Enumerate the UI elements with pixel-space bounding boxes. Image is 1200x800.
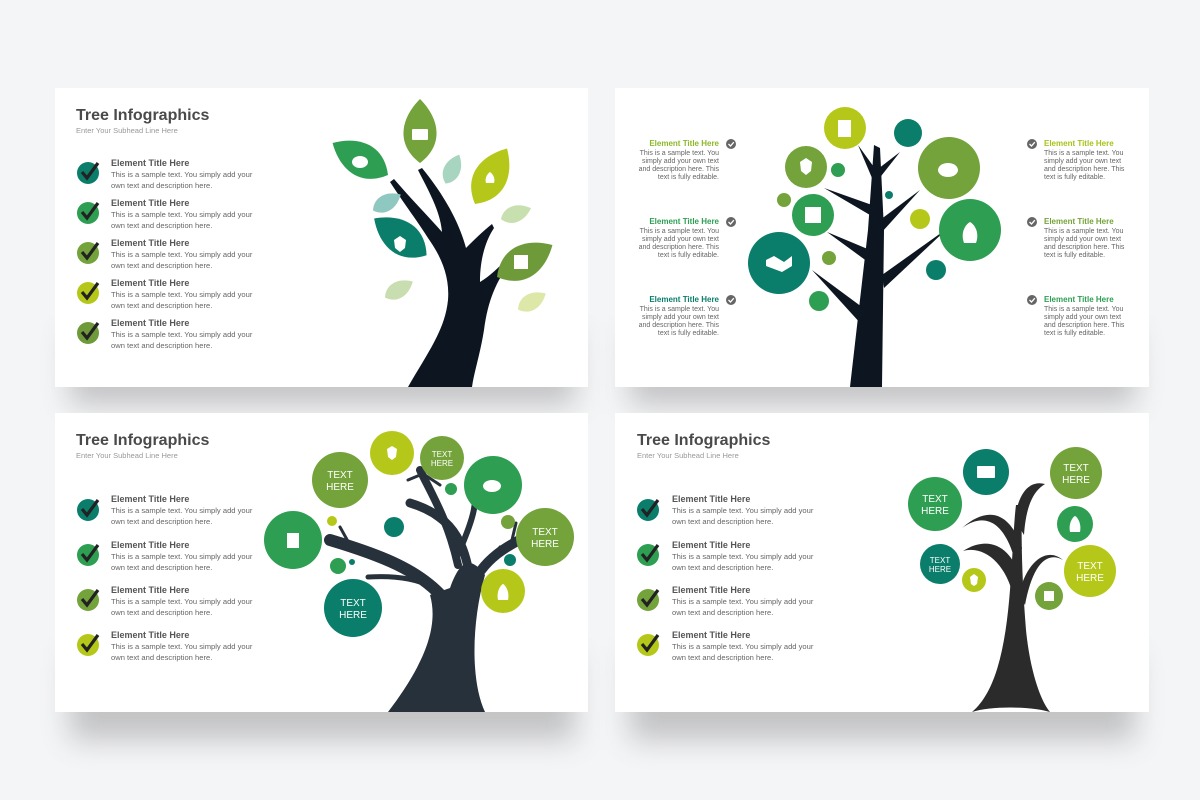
right text blocks: and description here. This xyxy=(1044,322,1125,329)
subhead: Enter Your Subhead Line Here xyxy=(76,451,178,460)
checklist: own text and description here. xyxy=(111,181,212,190)
circles: HERE xyxy=(921,506,949,517)
circles xyxy=(264,431,574,637)
left text blocks: text is fully editable. xyxy=(658,252,719,259)
checklist: This is a sample text. You simply add your xyxy=(111,597,253,606)
tree: straight trunk with branches xyxy=(812,145,948,387)
checklist: Element Title Here xyxy=(111,278,189,288)
left text blocks: Element Title Here xyxy=(649,139,720,148)
title: Tree Infographics xyxy=(76,432,209,449)
left text blocks: text is fully editable. xyxy=(658,174,719,181)
checklist: This is a sample text. You simply add your xyxy=(111,210,253,219)
shadows xyxy=(70,330,1135,740)
title: Tree Infographics xyxy=(76,107,209,124)
left text blocks: This is a sample text. You xyxy=(640,150,719,157)
checklist: Element Title Here xyxy=(672,540,750,550)
checklist xyxy=(77,494,253,662)
circles: TEXT xyxy=(340,598,366,609)
checklist: Element Title Here xyxy=(111,238,189,248)
tree xyxy=(962,483,1063,712)
check icons xyxy=(726,139,1037,305)
panel: top-right slide xyxy=(615,88,1149,387)
right text blocks: text is fully editable. xyxy=(1044,252,1105,259)
circles xyxy=(908,447,1116,610)
checklist: own text and description here. xyxy=(672,608,773,617)
right text blocks: and description here. This xyxy=(1044,244,1125,251)
circles with icons xyxy=(748,107,1001,311)
tree: curved trunk xyxy=(390,168,511,387)
circles: HERE xyxy=(929,565,951,574)
left text blocks: Element Title Here xyxy=(649,295,720,304)
subhead: Enter Your Subhead Line Here xyxy=(637,451,739,460)
checklist: Element Title Here xyxy=(111,540,189,550)
left text blocks: simply add your own text xyxy=(642,158,719,165)
circles: HERE xyxy=(1062,475,1090,486)
checklist: This is a sample text. You simply add your xyxy=(111,170,253,179)
circles: HERE xyxy=(326,482,354,493)
checklist: own text and description here. xyxy=(111,261,212,270)
right text blocks: simply add your own text xyxy=(1044,314,1121,321)
checklist: Element Title Here xyxy=(111,158,189,168)
checklist: This is a sample text. You simply add your xyxy=(111,290,253,299)
left text blocks: and description here. This xyxy=(639,322,719,329)
checklist: This is a sample text. You simply add your xyxy=(672,642,814,651)
checklist: Element Title Here xyxy=(672,630,750,640)
circles: TEXT xyxy=(930,556,950,565)
checklist xyxy=(77,158,253,350)
title: Tree Infographics xyxy=(637,432,770,449)
circles: HERE xyxy=(431,459,453,468)
circles: TEXT xyxy=(1077,561,1103,572)
circles: TEXT xyxy=(432,450,452,459)
checklist: This is a sample text. You simply add your xyxy=(672,506,814,515)
right text blocks: simply add your own text xyxy=(1044,158,1121,165)
checklist: own text and description here. xyxy=(111,301,212,310)
checklist: own text and description here. xyxy=(111,608,212,617)
left text blocks: and description here. This xyxy=(639,244,719,251)
circles: HERE xyxy=(1076,573,1104,584)
right text blocks: This is a sample text. You xyxy=(1044,228,1123,235)
leaves with icons xyxy=(324,99,561,317)
checklist: This is a sample text. You simply add your xyxy=(111,330,253,339)
right text blocks: Element Title Here xyxy=(1044,139,1114,148)
subhead: Enter Your Subhead Line Here xyxy=(76,126,178,135)
checklist: This is a sample text. You simply add your xyxy=(111,552,253,561)
checklist: own text and description here. xyxy=(111,517,212,526)
checklist: This is a sample text. You simply add your xyxy=(111,250,253,259)
left text blocks: text is fully editable. xyxy=(658,330,719,337)
checklist: own text and description here. xyxy=(111,653,212,662)
checklist: own text and description here. xyxy=(111,341,212,350)
right text blocks: and description here. This xyxy=(1044,166,1125,173)
panel: top-left slide xyxy=(55,88,588,387)
checklist: Element Title Here xyxy=(111,198,189,208)
left text blocks: and description here. This xyxy=(639,166,719,173)
panel: bottom-right slide xyxy=(615,413,1149,712)
left text blocks: simply add your own text xyxy=(642,314,719,321)
checklist: This is a sample text. You simply add your xyxy=(111,642,253,651)
checklist: own text and description here. xyxy=(672,563,773,572)
left text blocks: Element Title Here xyxy=(649,217,720,226)
left text blocks: This is a sample text. You xyxy=(640,228,719,235)
circles: HERE xyxy=(339,610,367,621)
checklist: This is a sample text. You simply add your xyxy=(672,552,814,561)
right text blocks: Element Title Here xyxy=(1044,217,1114,226)
tree xyxy=(330,470,545,712)
checklist: Element Title Here xyxy=(111,318,189,328)
checklist: This is a sample text. You simply add your xyxy=(672,597,814,606)
checklist: own text and description here. xyxy=(111,221,212,230)
left text blocks: simply add your own text xyxy=(642,236,719,243)
right text blocks: text is fully editable. xyxy=(1044,174,1105,181)
circles: TEXT xyxy=(532,527,558,538)
circles: TEXT xyxy=(327,470,353,481)
checklist: own text and description here. xyxy=(111,563,212,572)
checklist: Element Title Here xyxy=(672,494,750,504)
right text blocks: This is a sample text. You xyxy=(1044,150,1123,157)
checklist: Element Title Here xyxy=(111,630,189,640)
right text blocks xyxy=(1044,139,1125,337)
checklist: Element Title Here xyxy=(111,494,189,504)
checklist: Element Title Here xyxy=(672,585,750,595)
panel: bottom-left slide xyxy=(55,413,588,712)
circles: HERE xyxy=(531,539,559,550)
circles: TEXT xyxy=(1063,463,1089,474)
left text blocks: This is a sample text. You xyxy=(640,306,719,313)
checklist: This is a sample text. You simply add your xyxy=(111,506,253,515)
checklist xyxy=(637,494,814,662)
right text blocks: Element Title Here xyxy=(1044,295,1114,304)
checklist: own text and description here. xyxy=(672,517,773,526)
left text blocks xyxy=(639,139,720,337)
right text blocks: This is a sample text. You xyxy=(1044,306,1123,313)
right text blocks: text is fully editable. xyxy=(1044,330,1105,337)
circles: TEXT xyxy=(922,494,948,505)
right text blocks: simply add your own text xyxy=(1044,236,1121,243)
checklist: own text and description here. xyxy=(672,653,773,662)
checklist: Element Title Here xyxy=(111,585,189,595)
